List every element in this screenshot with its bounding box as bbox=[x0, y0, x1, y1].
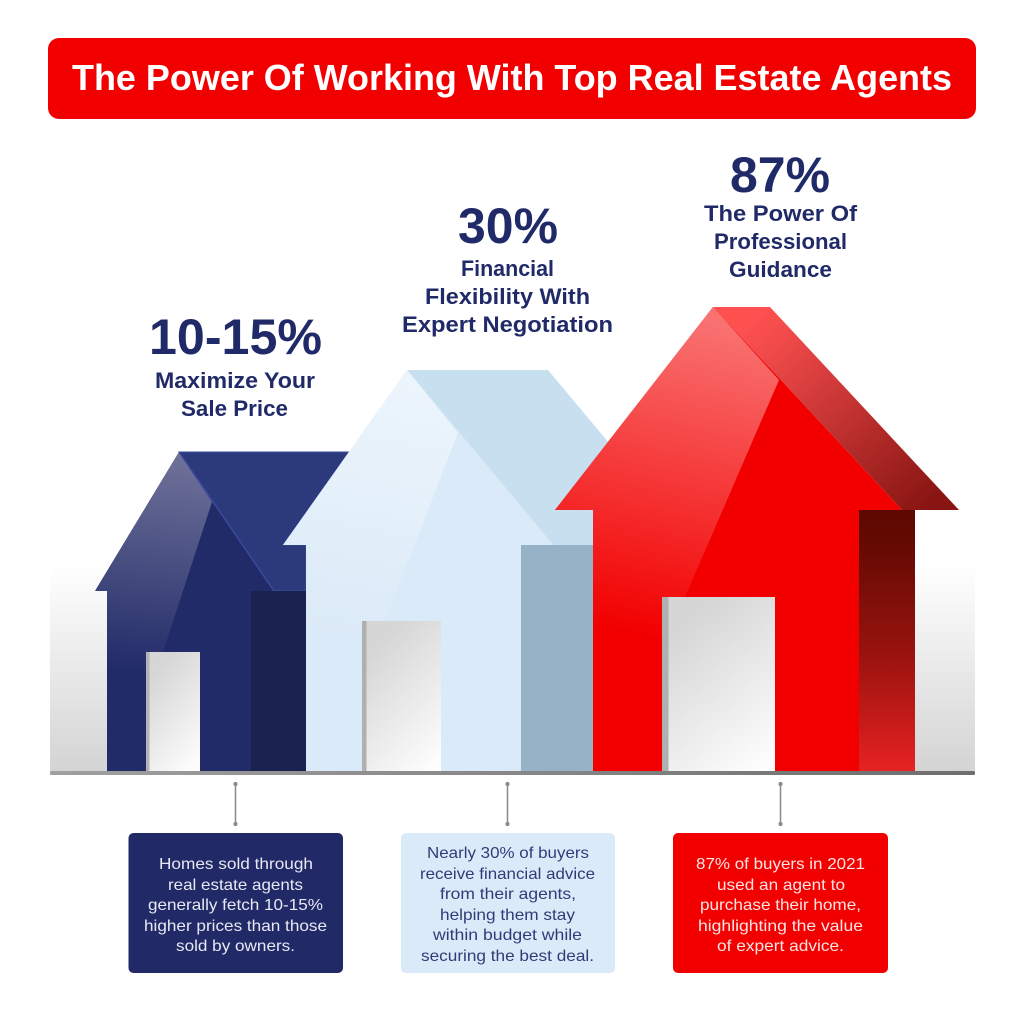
connector: light card bbox=[506, 782, 509, 826]
light card text: securing the best deal. bbox=[421, 948, 594, 965]
light side wall bbox=[521, 545, 593, 771]
caption: The Power Of Professional Guidance bbox=[704, 201, 858, 282]
connector: red card bbox=[779, 782, 782, 826]
navy shine bbox=[95, 452, 212, 690]
caption: The Power Of Professional Guidance: Professional bbox=[714, 229, 847, 254]
ground gradient backdrop bbox=[50, 565, 975, 771]
light shine bbox=[283, 370, 458, 660]
caption: Maximize Your Sale Price: Sale Price bbox=[181, 396, 288, 421]
light card text: from their agents, bbox=[440, 886, 576, 903]
caption: Financial Flexibility With Expert Negotiation: Flexibility With bbox=[425, 284, 590, 309]
red card text: highlighting the value bbox=[698, 918, 863, 935]
stat: 87% bbox=[704, 147, 858, 282]
light back roof bbox=[407, 370, 640, 545]
house: light blue bbox=[283, 370, 640, 771]
navy card text bbox=[144, 856, 327, 955]
house: red bbox=[555, 307, 959, 771]
caption: Financial Flexibility With Expert Negotiation bbox=[402, 256, 613, 337]
caption: Financial Flexibility With Expert Negotiation: Expert Negotiation bbox=[402, 312, 613, 337]
navy card text: Homes sold through bbox=[159, 856, 313, 873]
caption: Maximize Your Sale Price bbox=[155, 368, 315, 421]
card: light blue bbox=[401, 833, 615, 973]
light card text: helping them stay bbox=[440, 907, 575, 924]
red card text: used an agent to bbox=[717, 877, 845, 894]
red back roof bbox=[713, 307, 959, 510]
banner background bbox=[48, 38, 976, 119]
red card text: 87% of buyers in 2021 bbox=[696, 856, 865, 873]
navy card text: generally fetch 10-15% bbox=[148, 897, 323, 914]
navy card text: real estate agents bbox=[168, 877, 303, 894]
red shine bbox=[555, 307, 779, 640]
navy side wall bbox=[251, 591, 306, 771]
navy card text: sold by owners. bbox=[176, 938, 295, 955]
navy card text: higher prices than those bbox=[144, 918, 327, 935]
navy back roof bbox=[179, 452, 349, 591]
caption: Financial Flexibility With Expert Negotiation: Financial bbox=[461, 256, 554, 281]
red card background bbox=[673, 833, 888, 973]
connector: navy card bbox=[234, 782, 237, 826]
light card text bbox=[420, 845, 595, 965]
caption: The Power Of Professional Guidance: The Power Of bbox=[704, 201, 858, 226]
stat: 10-15% bbox=[149, 309, 322, 421]
percent 87%: 87% bbox=[730, 147, 830, 203]
card: red bbox=[673, 833, 888, 973]
navy door bbox=[146, 652, 200, 771]
light card text: within budget while bbox=[432, 927, 582, 944]
light door bbox=[362, 621, 441, 771]
navy front bbox=[95, 452, 274, 771]
house: navy bbox=[95, 452, 349, 771]
title banner bbox=[48, 38, 976, 119]
red front bbox=[555, 307, 902, 771]
card: navy bbox=[128, 833, 343, 973]
light card text: receive financial advice bbox=[420, 866, 595, 883]
red side wall bbox=[859, 510, 915, 771]
red card text bbox=[696, 856, 865, 955]
navy card background bbox=[128, 833, 343, 973]
red card text: of expert advice. bbox=[717, 938, 844, 955]
caption: The Power Of Professional Guidance: Guidance bbox=[729, 257, 832, 282]
light front bbox=[283, 370, 553, 771]
percent 30%: 30% bbox=[458, 198, 558, 254]
title text: The Power Of Working With Top Real Estate Agents bbox=[72, 57, 952, 98]
red card text: purchase their home, bbox=[700, 897, 861, 914]
navy roof edge bbox=[179, 452, 274, 591]
caption: Maximize Your Sale Price: Maximize Your bbox=[155, 368, 315, 393]
ground line bbox=[50, 771, 975, 775]
light card text: Nearly 30% of buyers bbox=[427, 845, 589, 862]
percent 10-15%: 10-15% bbox=[149, 309, 322, 365]
light card background bbox=[401, 833, 615, 973]
stat: 30% bbox=[402, 198, 613, 337]
red door bbox=[662, 597, 775, 771]
